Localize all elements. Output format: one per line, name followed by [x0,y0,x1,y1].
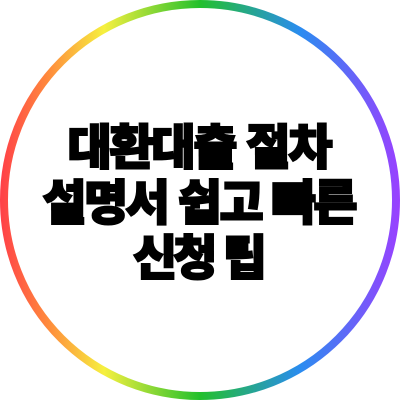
title [42,122,358,286]
title line 2: 설명서 쉽고 빠른 [42,178,358,230]
title line 1: 대환대출 절차 [68,122,332,175]
title line 3: 신청 팁 [133,232,267,286]
